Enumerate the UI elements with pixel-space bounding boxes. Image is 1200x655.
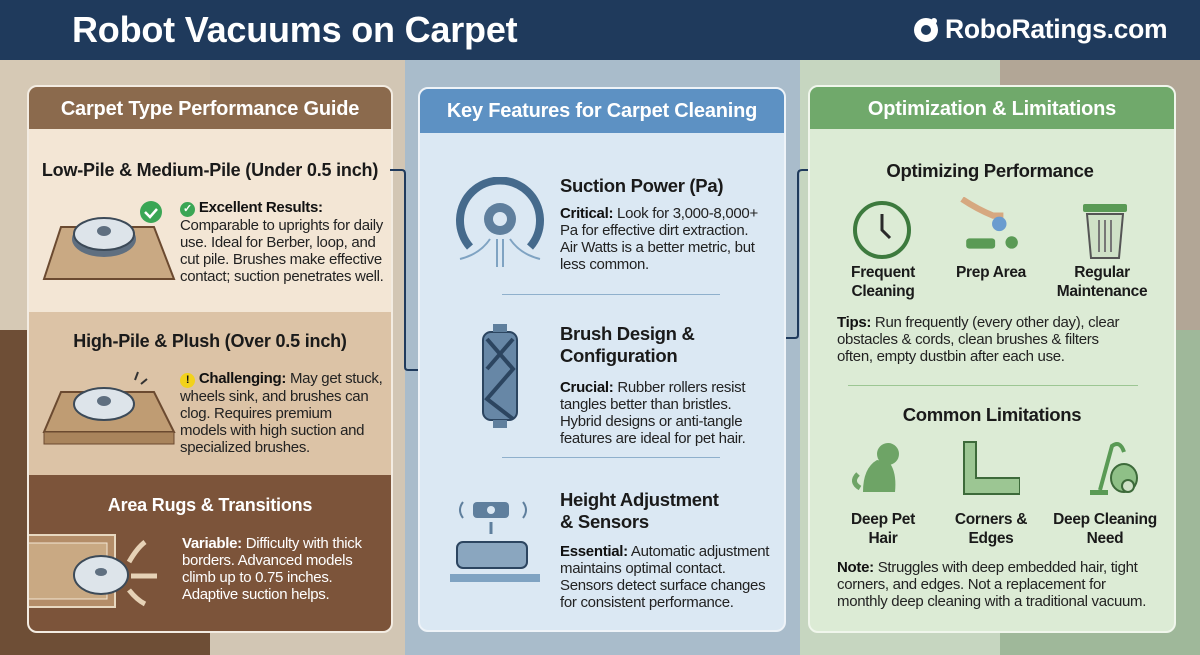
panel: key features: [418, 87, 786, 632]
section: optimizing performance: often, empty dustbin after each use.: [837, 348, 1065, 365]
section: limitations: [837, 404, 1157, 610]
icon: trash: [1083, 204, 1127, 259]
feature: height sensors: [450, 489, 770, 611]
feature: suction: Critical: Look for 3,000-8,000+: [560, 205, 758, 222]
icon: vacuum: [1090, 442, 1138, 495]
section: limitations: Corners &: [955, 511, 1027, 528]
feature: brush: Brush Design &: [560, 323, 695, 344]
section: low pile: Comparable to uprights for daily: [180, 217, 383, 234]
icon: dog: [852, 443, 899, 492]
section: limitations: Common Limitations: [903, 404, 1081, 425]
section: optimizing performance: obstacles & cords, clean brushes & filters: [837, 331, 1099, 348]
section: area rugs: borders. Advanced models: [182, 552, 352, 569]
arrow: middle to right: [786, 169, 808, 339]
panel heading: Optimization & Limitations: [868, 98, 1116, 120]
feature: height sensors: Essential: Automatic adjustment: [560, 543, 769, 560]
section: optimizing performance: Prep Area: [956, 264, 1026, 281]
section: high pile: High-Pile & Plush (Over 0.5 inch): [73, 331, 347, 351]
section: optimizing performance: [837, 160, 1148, 365]
section: limitations: Hair: [869, 530, 897, 547]
icon: robot on low carpet: [42, 201, 176, 280]
section: optimizing performance: Optimizing Performance: [886, 160, 1094, 181]
icon: roller brush: [482, 324, 518, 428]
section: low pile: Excellent Results:: [199, 199, 323, 216]
feature: height sensors: maintains optimal contact.: [560, 560, 726, 577]
icon: suction: [456, 177, 544, 267]
icon: prep area: [960, 197, 1018, 249]
section: optimizing performance: Cleaning: [851, 283, 915, 300]
arrow: left to middle: [390, 169, 418, 371]
feature: suction: [456, 175, 758, 273]
section: low pile: ✓: [183, 203, 192, 215]
panel: carpet types: [27, 85, 393, 633]
section: low pile: Low-Pile & Medium-Pile (Under 0.5 inch): [42, 160, 378, 180]
section: low pile: cut pile. Brushes make effective: [180, 251, 382, 268]
feature: suction: Air Watts is a better metric, but: [560, 239, 755, 256]
section: high pile: specialized brushes.: [180, 439, 310, 456]
panel heading: Carpet Type Performance Guide: [61, 98, 359, 120]
panel heading: [420, 89, 784, 133]
section: limitations: Edges: [968, 530, 1014, 547]
note text: Note: Struggles with deep embedded hair, tight: [837, 559, 1138, 576]
feature: brush: [482, 323, 746, 447]
icon: robot crossing rug: [29, 534, 157, 608]
icon: robot on plush carpet: [42, 372, 176, 444]
section: optimizing performance: Frequent: [851, 264, 915, 281]
section: high pile: models with high suction and: [180, 422, 364, 439]
panel heading: [29, 87, 391, 129]
section: limitations: Deep Pet: [851, 511, 915, 528]
feature: height sensors: Height Adjustment: [560, 489, 719, 510]
panel heading: [810, 87, 1174, 129]
feature: height sensors: Sensors detect surface changes: [560, 577, 765, 594]
feature: suction: less common.: [560, 256, 649, 273]
note text: corners, and edges. Not a replacement for: [837, 576, 1106, 593]
section: high pile: !: [186, 374, 189, 386]
section: high pile: Challenging: May get stuck,: [199, 370, 382, 387]
section: low pile: [42, 160, 384, 285]
icon: corner: [963, 441, 1020, 495]
feature: brush: Hybrid designs or anti-tangle: [560, 413, 742, 430]
feature: height sensors: for consistent performance.: [560, 594, 734, 611]
feature: suction: Suction Power (Pa): [560, 175, 723, 196]
section: optimizing performance: Tips: Run frequently (every other day), clear: [837, 314, 1119, 331]
section: high pile: clog. Requires premium: [180, 405, 332, 422]
icon: clock: [853, 201, 911, 259]
title: Robot Vacuums on Carpet: [72, 9, 517, 50]
section: low pile: use. Ideal for Berber, loop, and: [180, 234, 376, 251]
section: optimizing performance: Regular: [1074, 264, 1130, 281]
divider with caret: [502, 457, 720, 467]
section: limitations: Need: [1087, 530, 1123, 547]
section: limitations: Deep Cleaning: [1053, 511, 1157, 528]
note text: [837, 559, 1146, 610]
feature: brush: features are ideal for pet hair.: [560, 430, 746, 447]
feature: suction: Pa for effective dirt extraction.: [560, 222, 748, 239]
divider with caret: [502, 294, 720, 304]
panel heading: Key Features for Carpet Cleaning: [447, 100, 757, 122]
section: low pile: contact; suction penetrates well.: [180, 268, 384, 285]
section: area rugs: Variable: Difficulty with thick: [182, 535, 362, 552]
icon: sensors: [450, 502, 540, 582]
divider with caret: [848, 385, 1138, 395]
panel: optimization: [808, 85, 1176, 633]
feature: brush: Configuration: [560, 345, 677, 366]
feature: brush: tangles better than bristles.: [560, 396, 731, 413]
header bar: [0, 0, 1200, 60]
note text: monthly deep cleaning with a traditional vacuum.: [837, 593, 1146, 610]
feature: height sensors: & Sensors: [560, 511, 649, 532]
section: area rugs: Area Rugs & Transitions: [108, 495, 312, 515]
section: area rugs: climb up to 0.75 inches.: [182, 569, 332, 586]
logo: RoboRatings.com: [945, 14, 1167, 44]
section: area rugs: [29, 475, 391, 635]
feature: brush: Crucial: Rubber rollers resist: [560, 379, 745, 396]
section: high pile: [29, 312, 391, 475]
section: area rugs: Adaptive suction helps.: [182, 586, 329, 603]
section: optimizing performance: Maintenance: [1057, 283, 1147, 300]
section: high pile: wheels sink, and brushes can: [180, 388, 368, 405]
